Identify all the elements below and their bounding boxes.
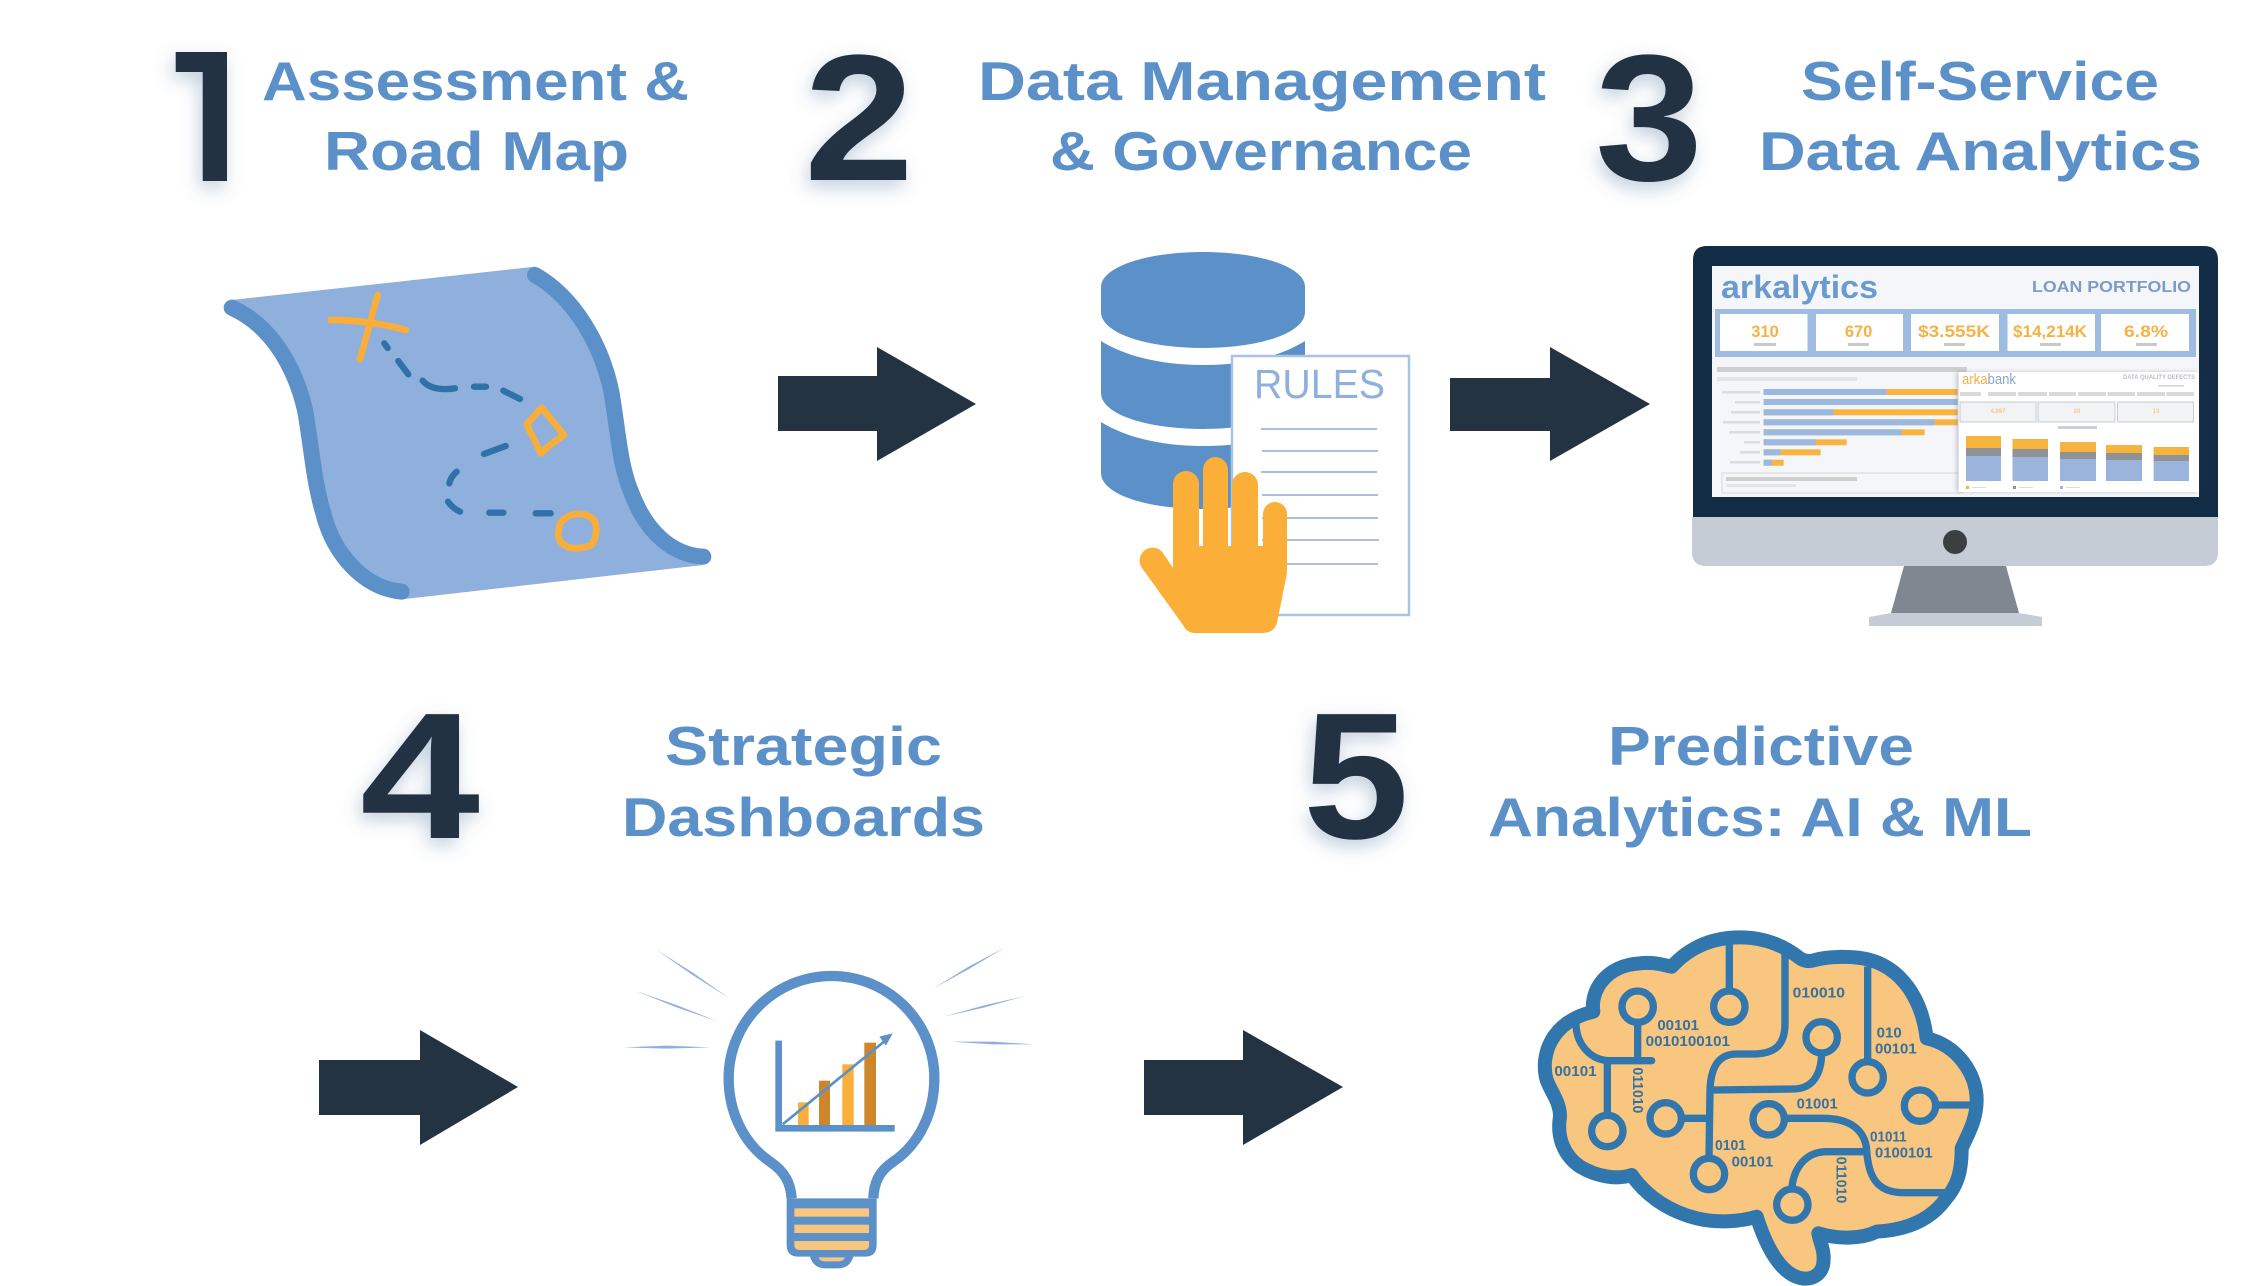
rules document: RULES [1254, 361, 1385, 407]
heading: Strategic Dashboards [622, 715, 985, 848]
overlay panel: arkabank data quality: DATA QUALITY DEFECTS [2123, 375, 2195, 381]
arrow 4 to 5 [1144, 1030, 1343, 1145]
binary labels [1554, 984, 1933, 1203]
icon: treasure map [232, 267, 703, 599]
binary labels: 00101 [1875, 1040, 1917, 1057]
bulb glass [729, 976, 934, 1198]
step number 1: 1 [113, 19, 313, 220]
binary labels: 00101 [1554, 1063, 1597, 1080]
stacked bar chart [1717, 367, 1967, 493]
overlay panel: arkabank data quality: 4,897 [1990, 409, 2006, 415]
step number 3: 3 [1595, 18, 1703, 219]
binary labels: 00101 [1732, 1154, 1773, 1171]
brain outline [1545, 937, 1977, 1279]
KPI strip: $3.555K [1918, 323, 1990, 341]
screen [1712, 266, 2199, 497]
KPI strip: 310 [1751, 323, 1779, 341]
title: loan portfolio: LOAN PORTFOLIO [2032, 279, 2191, 296]
binary labels: 01001 [1797, 1095, 1838, 1112]
icon: monitor with dashboards [1692, 246, 2218, 626]
arrow 2 to 3 [1450, 347, 1650, 461]
heading: Data Management & Governance [978, 50, 1546, 182]
monitor frame [1692, 246, 2218, 566]
binary labels: 00101 [1657, 1017, 1699, 1034]
binary labels: 010 [1877, 1024, 1902, 1041]
overlay panel: arkabank data quality: 13 [2153, 409, 2160, 415]
KPI strip [1715, 309, 2196, 357]
binary labels: 01011 [1870, 1129, 1907, 1146]
database cylinder [1101, 252, 1305, 509]
bulb rays [623, 947, 1034, 1049]
binary labels: 0100101 [1875, 1144, 1933, 1161]
bulb base [787, 1198, 877, 1268]
step number 2: 2 [804, 18, 914, 219]
heading: Assessment & Road Map: Road Map [324, 120, 629, 182]
heading: Strategic Dashboards: Dashboards [622, 786, 985, 848]
monitor stand [1869, 566, 2042, 626]
binary labels: 0010100101 [1646, 1033, 1730, 1050]
heading: Self-Service Data Analytics: Data Analytics [1759, 120, 2202, 182]
arrow 1 to 2 [778, 347, 976, 461]
step number 1 [164, 49, 234, 197]
binary labels: 011010 [1832, 1157, 1849, 1203]
rules document [1232, 356, 1409, 615]
step number 4: 4 [360, 676, 480, 877]
overlay panel: arkabank data quality: 20 [2074, 409, 2081, 415]
icon: light bulb with chart [623, 947, 1034, 1268]
heading: Self-Service Data Analytics [1759, 50, 2202, 182]
heading: Self-Service Data Analytics: Self-Service [1801, 50, 2159, 112]
heading: Strategic Dashboards: Strategic [665, 715, 942, 777]
heading: Assessment & Road Map: Assessment & [262, 50, 689, 112]
KPI strip: $14,214K [2013, 323, 2087, 341]
binary labels: 0101 [1715, 1137, 1746, 1154]
step number 5: 5 [1303, 676, 1409, 877]
icon: circuit brain [1545, 937, 1977, 1279]
logo: arkalytics: arkalytics [1721, 269, 1878, 305]
overlay panel: arkabank data quality [1959, 371, 2199, 492]
arrow 3 to 4 [319, 1030, 518, 1145]
icon: database with rules document and hand [1101, 252, 1409, 633]
hand [1140, 457, 1287, 633]
KPI strip: 6.8% [2124, 323, 2168, 341]
circuit traces [1576, 943, 1971, 1220]
logo: arkabank: arkabank [1962, 371, 2016, 388]
KPI strip: 670 [1845, 323, 1872, 341]
heading: Predictive Analytics: AI & ML: Predictive [1608, 715, 1914, 777]
heading: Predictive Analytics: AI & ML: Analytics: AI & ML [1488, 786, 2032, 848]
heading: Assessment & Road Map [262, 50, 689, 182]
binary labels: 011010 [1629, 1067, 1646, 1113]
growth chart [775, 1033, 895, 1132]
heading: Data Management & Governance: & Governance [1050, 120, 1472, 182]
heading: Data Management & Governance: Data Management [978, 50, 1546, 112]
binary labels: 010010 [1793, 984, 1845, 1001]
heading: Predictive Analytics: AI & ML [1488, 715, 2032, 848]
